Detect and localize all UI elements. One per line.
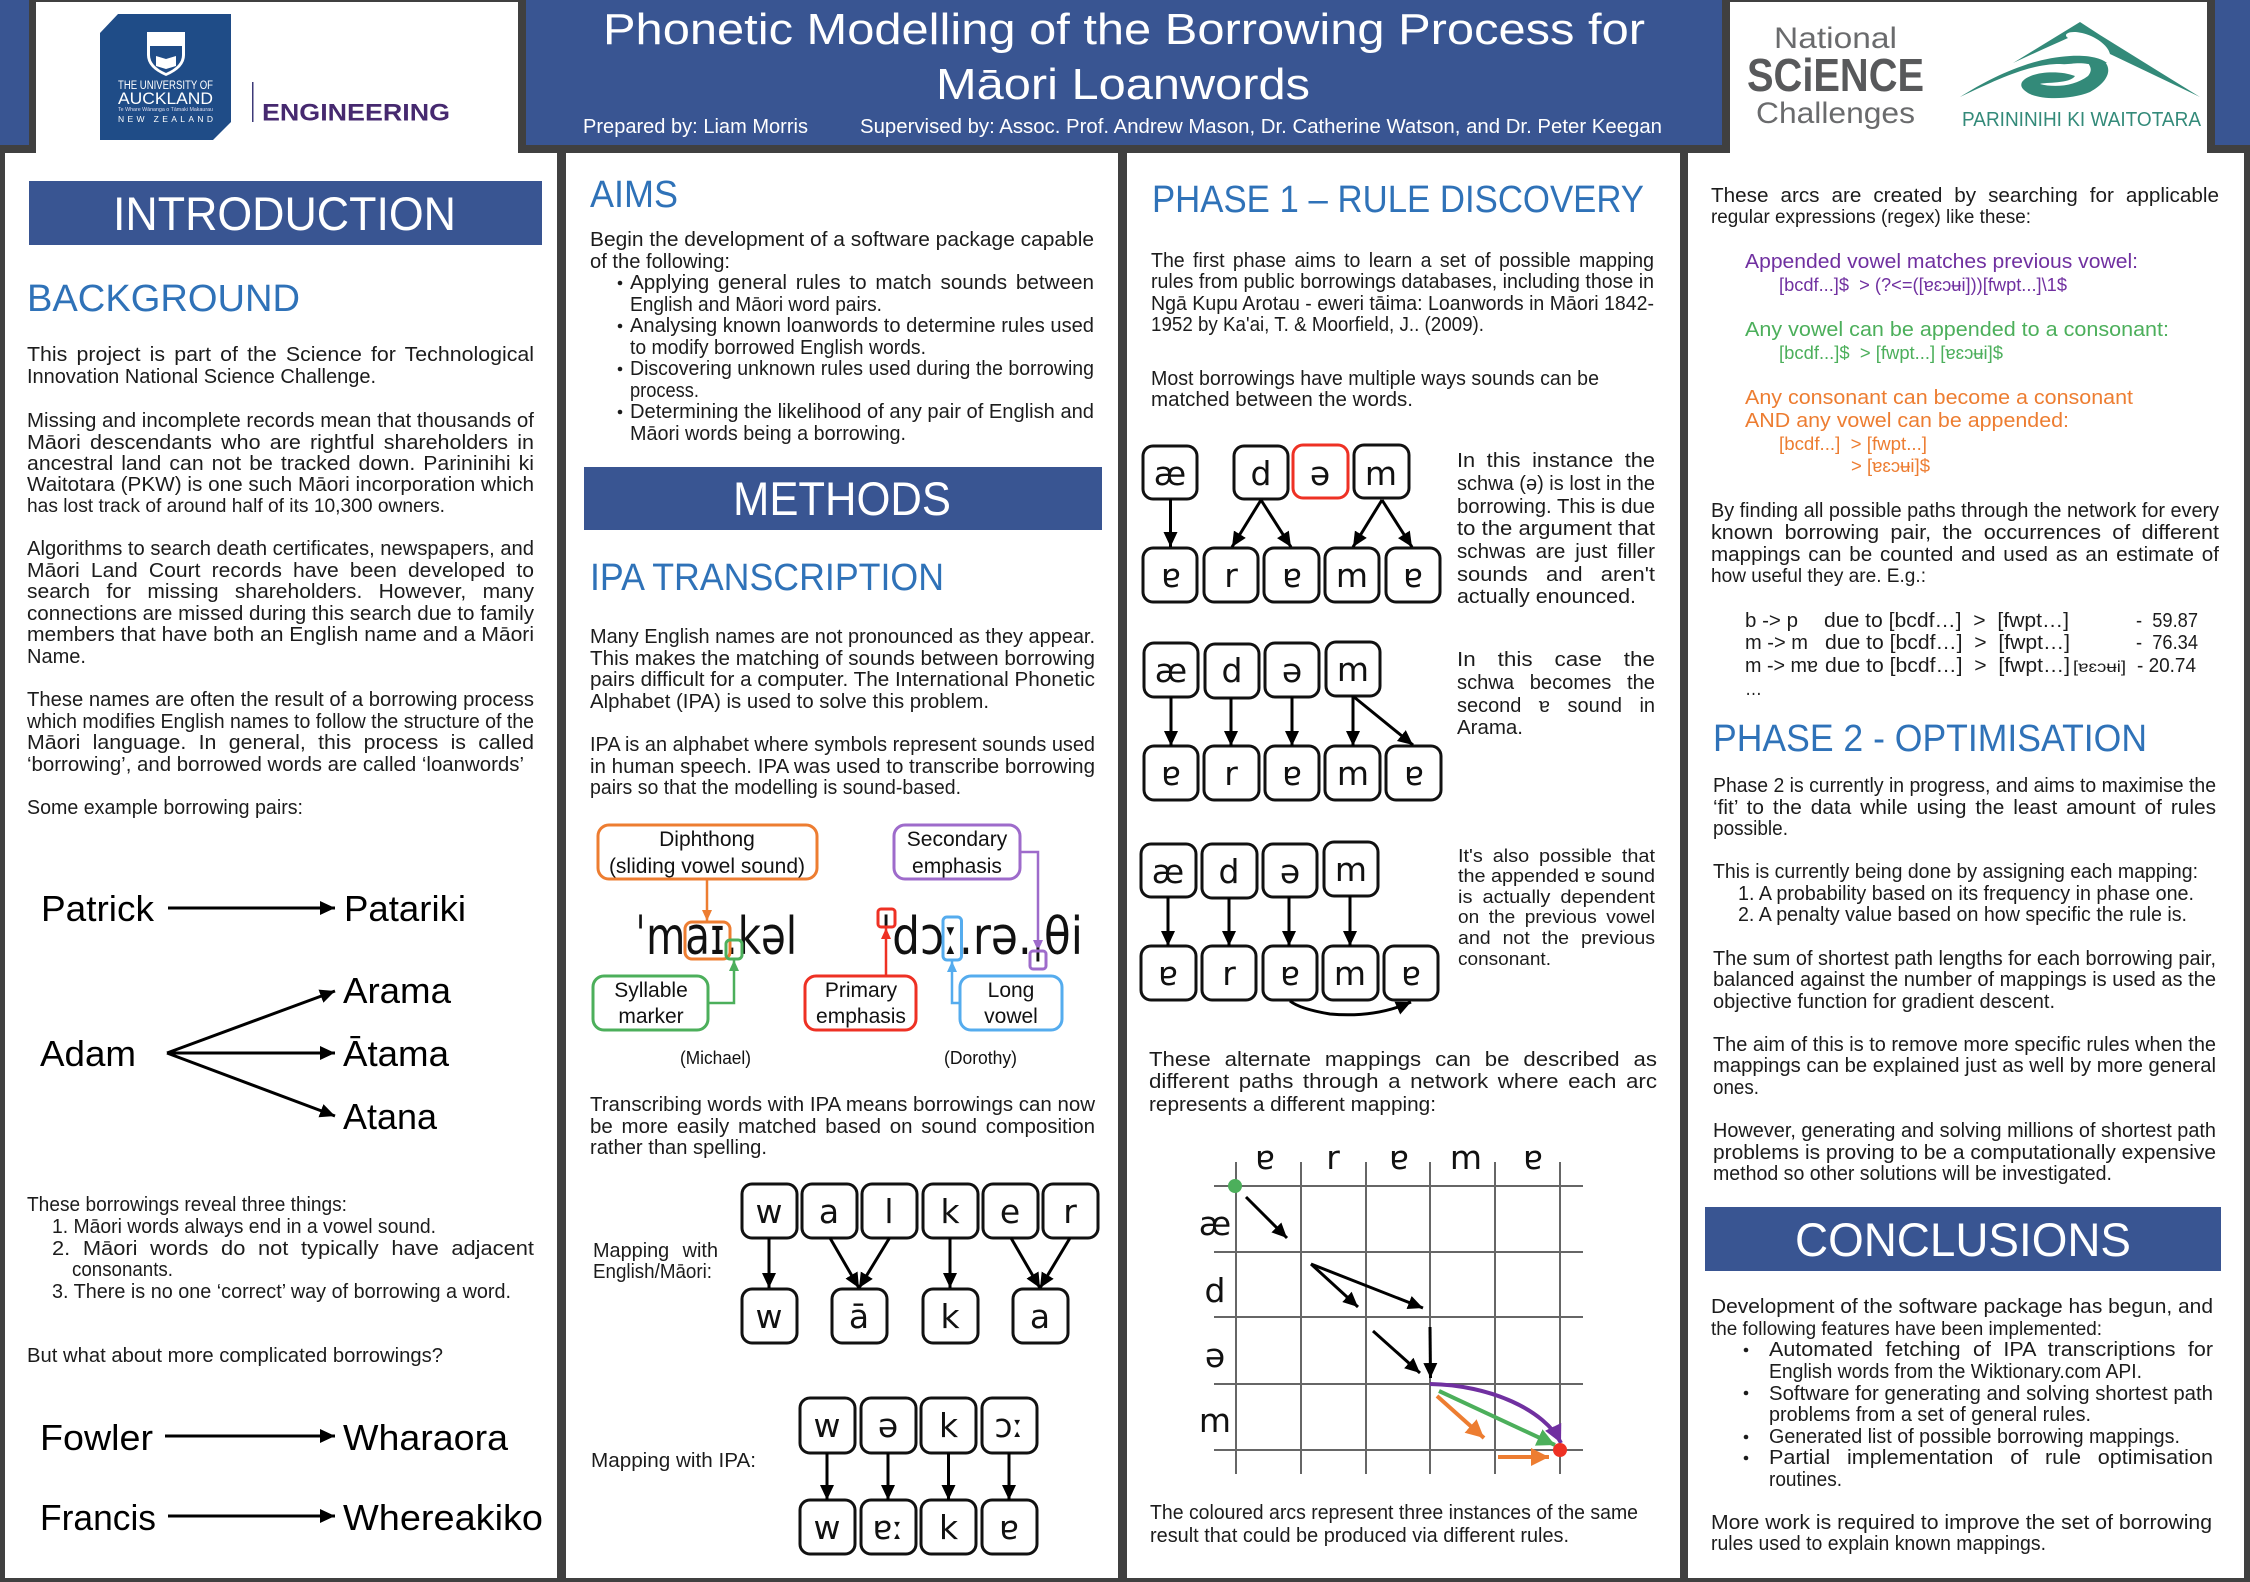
engineering wordmark: ENGINEERING — [262, 100, 450, 126]
text: alternate mappings: different paths through a network where each arc — [1149, 1071, 1657, 1093]
label: mapping with English/Māori — [593, 1240, 718, 1283]
diagram: mapping two, schwa becomes vowel: m — [1337, 650, 1369, 689]
heading: phase 2: PHASE 2 - OPTIMISATION — [1713, 718, 2147, 760]
diagram: IPA mapping: ə — [878, 1406, 898, 1445]
diagram: mapping three, appended vowel: m — [1334, 954, 1366, 993]
text: project context: Waitotara (PKW) is one such Māori incorporation which — [27, 474, 534, 496]
chart: mapping network grid: æ — [1199, 1204, 1231, 1243]
text: IPA benefit — [590, 1094, 1096, 1159]
text: conclusions: Automated fetching of IPA transcriptions for — [1769, 1339, 2213, 1361]
diagram: English to Māori mapping: k — [940, 1192, 960, 1231]
text: aims list: to modify borrowed English words. — [630, 337, 926, 359]
callout: secondary emphasis: emphasis — [912, 855, 1002, 878]
header: title banner — [526, 0, 1722, 145]
callout: secondary emphasis: Secondary — [907, 828, 1008, 851]
text: phase 2 description: balanced against the number of mappings is used as the — [1713, 969, 2216, 991]
text: schwa lost — [1457, 450, 1655, 608]
divider — [252, 82, 254, 122]
callout: diphthong: (sliding vowel sound) — [609, 855, 805, 878]
diagram: mapping one, schwa lost: r — [1224, 556, 1238, 595]
text: counting paths: known borrowing pair, the occurrences of different — [1711, 522, 2219, 544]
label: mapping with English/Māori: Mapping with — [593, 1240, 718, 1262]
text: alternate mappings: represents a different mapping: — [1149, 1094, 1436, 1116]
text: project context: Māori language. In general, this process is called — [27, 732, 534, 754]
table: mapping counts: m -> m — [1745, 632, 1808, 654]
text: project context: Algorithms to search death certificates, newspapers, and — [27, 538, 534, 560]
table: mapping counts: - 20.74 — [2137, 655, 2196, 677]
text: phase 1 introduction: rules from public borrowings databases, including those in — [1151, 271, 1654, 293]
diagram: mapping two, schwa becomes vowel: ɐ — [1282, 754, 1302, 793]
text: conclusions: Development of the software package has begun, and — [1711, 1296, 2213, 1318]
text: appended vowel: consonant. — [1458, 949, 1551, 969]
text: three findings: consonants. — [72, 1259, 173, 1281]
icon: University of Auckland crest — [100, 14, 231, 140]
diagram: Fowler and Francis borrowing arrows — [40, 1417, 543, 1538]
diagram: IPA mapping: k — [939, 1406, 959, 1445]
callout: primary emphasis — [805, 928, 916, 1030]
text: project context: These names are often the result of a borrowing process — [27, 689, 534, 711]
text: phase 2 description: mappings can be explained just as well by more general — [1713, 1055, 2216, 1077]
chart: mapping network grid: ɐ — [1523, 1138, 1543, 1177]
text: schwa lost: to the argument that — [1457, 518, 1655, 540]
panel: introduction — [5, 2, 557, 1578]
text: project context — [26, 344, 534, 819]
diagram: Patrick and Adam borrowing arrows: Adam — [40, 1033, 136, 1074]
text: schwa becomes vowel: Arama. — [1457, 717, 1523, 739]
text: IPA explanation: IPA is an alphabet where symbols represent sounds used — [590, 734, 1095, 756]
table: mapping counts: m -> mɐ — [1745, 655, 1818, 677]
text: phase 2 description: objective function for gradient descent. — [1713, 991, 2055, 1013]
text: three findings: But what about more complicated borrowings? — [27, 1345, 443, 1367]
diagram: English to Māori mapping: l — [884, 1192, 894, 1231]
diagram: mapping three, appended vowel: m — [1335, 850, 1367, 889]
text: schwa lost: sounds and aren't — [1457, 564, 1655, 586]
text: phase 2 description: 2. A penalty value based on how specific the rule is. — [1738, 904, 2187, 926]
text: project context: has lost track of around half of its 10,300 owners. — [27, 496, 445, 517]
text: schwa lost: schwa (ə) is lost in the — [1457, 473, 1655, 495]
text: project context: Innovation National Science Challenge. — [27, 366, 376, 388]
text: phase 1 introduction: matched between the words. — [1151, 389, 1413, 411]
diagram: IPA mapping: ɐː — [873, 1508, 903, 1547]
diagram: mapping three, appended vowel: ɐ — [1158, 954, 1178, 993]
text: schwa becomes vowel: In this case the — [1457, 649, 1655, 671]
text: three findings: These borrowings reveal three things: — [27, 1194, 347, 1216]
diagram: mapping two, schwa becomes vowel: r — [1224, 754, 1238, 793]
text: phase 2 description: method so other solutions will be investigated. — [1713, 1163, 2112, 1185]
authors: Prepared by: Liam Morris — [583, 116, 808, 138]
text: IPA explanation: Many English names are not pronounced as they appear. — [590, 626, 1095, 648]
chart: mapping network grid: r — [1326, 1138, 1340, 1177]
regex: purple rule — [1745, 251, 2138, 295]
table: mapping counts — [1745, 610, 2198, 700]
diagram: English to Māori mapping: a — [1030, 1297, 1050, 1336]
diagram: English to Māori mapping: w — [756, 1192, 782, 1231]
diagram: mapping two, schwa becomes vowel: d — [1222, 651, 1242, 690]
callout: syllable marker: Syllable — [614, 979, 688, 1002]
diagram: Fowler and Francis borrowing arrows: Whereakiko — [343, 1497, 543, 1538]
diagram: IPA mapping: w — [814, 1406, 840, 1445]
diagram: mapping one, schwa lost: m — [1336, 556, 1368, 595]
text: counting paths: mappings can be counted and used as an estimate of — [1711, 544, 2219, 566]
diagram: mapping three, appended vowel: r — [1222, 954, 1236, 993]
text: alternate mappings — [1149, 1049, 1657, 1116]
text: phase 2 description: This is currently being done by assigning each mapping: — [1713, 861, 2198, 883]
chart: mapping network grid: d — [1205, 1271, 1225, 1310]
logo box: University of Auckland Engineering — [36, 2, 518, 154]
diagram: mapping two, schwa becomes vowel: ɐ — [1404, 754, 1424, 793]
text: IPA explanation — [590, 626, 1095, 799]
callout: diphthong — [598, 825, 817, 921]
text: conclusions: Generated list of possible borrowing mappings. — [1769, 1426, 2180, 1448]
diagram: mapping two, schwa becomes vowel: m — [1337, 754, 1369, 793]
table: mapping counts: due to [bcdf…] > [fwpt…] — [1825, 655, 2070, 677]
table: mapping counts: … — [1745, 678, 1762, 700]
diagram: mapping one, schwa lost: d — [1251, 454, 1271, 493]
authors: Supervised by: Assoc. Prof. Andrew Mason, Dr. Catherine Watson, and Dr. Peter Keegan — [860, 116, 1662, 138]
callout: long vowel: vowel — [984, 1005, 1038, 1028]
diagram: Patrick and Adam borrowing arrows: Ātama — [343, 1033, 450, 1074]
panel: regex, phase 2 and conclusions — [1688, 2, 2244, 1578]
title: Māori Loanwords — [936, 60, 1310, 109]
text: project context: search for missing shareholders. However, many — [27, 581, 534, 603]
icon: University of Auckland crest: THE UNIVERSITY OF — [118, 80, 213, 92]
text: three findings: 3. There is no one ‘correct’ way of borrowing a word. — [52, 1281, 511, 1303]
text: conclusions: problems from a set of general rules. — [1769, 1404, 2091, 1426]
regex: purple rule: [bcdf...]$ > (?<=([ɐɛɔʉi]))[fwpt...]\1$ — [1779, 275, 2067, 295]
text: phase 2 description: 1. A probability based on its frequency in phase one. — [1738, 883, 2194, 905]
text: regular expressions intro — [1711, 185, 2219, 228]
text: three findings: 1. Māori words always end in a vowel sound. — [52, 1216, 436, 1238]
text: phase 1 introduction: Most borrowings have multiple ways sounds can be — [1151, 368, 1599, 390]
conclusions bar: CONCLUSIONS — [1795, 1213, 2131, 1266]
introduction bar — [29, 181, 542, 245]
label: Dorothy: (Dorothy) — [944, 1048, 1017, 1068]
text: project context: Some example borrowing pairs: — [27, 797, 303, 819]
text: counting paths: By finding all possible paths through the network for every — [1711, 500, 2219, 522]
text: coloured arcs caption: result that could be produced via different rules. — [1150, 1525, 1569, 1547]
text: aims list: English and Māori word pairs. — [630, 294, 882, 316]
chart: mapping network grid: ə — [1205, 1336, 1225, 1375]
text: schwa lost: schwas are just filler — [1457, 541, 1655, 563]
callout: long vowel — [952, 961, 1062, 1030]
heading: background: BACKGROUND — [27, 278, 300, 320]
diagram: mapping three, appended vowel: ə — [1280, 852, 1300, 891]
icon: University of Auckland crest: Te Whare Wānanga o Tāmaki Makaurau — [118, 107, 213, 113]
diagram: English to Māori mapping: e — [1000, 1192, 1020, 1231]
text: phase 2 description — [1713, 775, 2216, 1185]
text: project context: ‘borrowing’, and borrowed words are called ‘loanwords’ — [27, 754, 524, 776]
text: phase 1 introduction: The first phase aims to learn a set of possible mapping — [1151, 250, 1654, 272]
text: project context: ancestral land can not be tracked down. Parininihi ki — [27, 453, 534, 475]
heading: phase 1: PHASE 1 – RULE DISCOVERY — [1152, 179, 1644, 221]
diagram: Patrick and Adam borrowing arrows — [40, 888, 466, 1137]
text: three findings: 2. Māori words do not typically have adjacent — [52, 1238, 534, 1260]
conclusions bar — [1705, 1207, 2221, 1271]
chart: mapping network grid: m — [1450, 1138, 1482, 1177]
diagram: mapping one, schwa lost: m — [1365, 454, 1397, 493]
title: Phonetic Modelling of the Borrowing Process for — [603, 5, 1645, 54]
text: coloured arcs caption: The coloured arcs represent three instances of the same — [1150, 1502, 1638, 1524]
diagram: mapping one, schwa lost — [1143, 445, 1440, 602]
diagram: mapping three, appended vowel: ɐ — [1401, 954, 1421, 993]
text: phase 2 description: ‘fit’ to the data while using the least amount of rules — [1713, 797, 2216, 819]
header band right — [2215, 0, 2250, 145]
text: schwa becomes vowel — [1457, 649, 1655, 739]
text: conclusions: rules used to explain known mappings. — [1711, 1533, 2046, 1555]
text: aims list: Determining the likelihood of any pair of English and — [630, 401, 1094, 423]
text: appended vowel: It's also possible that — [1458, 846, 1655, 866]
text: IPA benefit: be more easily matched based on sound composition — [590, 1116, 1095, 1138]
text: IPA explanation: This makes the matching of sounds between borrowing — [590, 648, 1095, 670]
regex: green rule: [bcdf...]$ > [fwpt...] [ɐɛɔʉi]$ — [1779, 343, 2003, 363]
table: mapping counts: [ɐɛɔʉi] — [2073, 659, 2126, 676]
regex: orange rule — [1745, 387, 2133, 476]
diagram: mapping one, schwa lost: ɐ — [1403, 556, 1423, 595]
regex: orange rule: [bcdf...] > [fwpt...] — [1779, 434, 1927, 454]
logo: National Science Challenges: Challenges — [1756, 97, 1915, 130]
text: IPA explanation: Alphabet (IPA) is used to solve this problem. — [590, 691, 989, 713]
text: conclusions: More work is required to improve the set of borrowing — [1711, 1512, 2212, 1534]
text: IPA explanation: pairs difficult for a computer. The International Phonetic — [590, 669, 1095, 691]
chart: mapping network grid: ɐ — [1389, 1138, 1409, 1177]
text: project context: members that have both an English name and a Māori — [27, 624, 534, 646]
logo: Parininihi ki Waitotara: PARININIHI KI WAITOTARA — [1962, 109, 2202, 131]
regex: orange rule: > [ɐɛɔʉi]$ — [1851, 456, 1930, 476]
text: coloured arcs caption — [1150, 1502, 1638, 1547]
diagram: mapping two, schwa becomes vowel: ɐ — [1161, 754, 1181, 793]
text: phase 2 description: possible. — [1713, 818, 1788, 840]
diagram: mapping one, schwa lost: ɐ — [1161, 556, 1181, 595]
label: mapping with IPA: Mapping with IPA: — [591, 1450, 756, 1472]
methods bar — [584, 467, 1102, 530]
diagram: Patrick and Adam borrowing arrows: Patariki — [344, 888, 466, 929]
panel: aims and methods — [566, 153, 1118, 1578]
text: project context: Māori Land Court records have been developed to — [27, 560, 534, 582]
text: conclusions: Partial implementation of rule optimisation — [1769, 1447, 2213, 1469]
text: phase 1 introduction: Ngā Kupu Arotau - eweri tāima: Loanwords in Māori 1842- — [1151, 293, 1654, 315]
text: aims list: Māori words being a borrowing. — [630, 423, 906, 445]
title — [603, 5, 1645, 109]
diagram: mapping one, schwa lost: ɐ — [1282, 556, 1302, 595]
text: project context: connections are missed during this search due to family — [27, 603, 534, 625]
diagram: English to Māori mapping — [593, 1184, 1098, 1343]
diagram: mapping two, schwa becomes vowel: æ — [1155, 651, 1187, 690]
callout: syllable marker — [593, 960, 734, 1030]
text: appended vowel: and not the previous — [1458, 928, 1655, 948]
regex: green rule — [1745, 319, 2169, 363]
text: schwa lost: borrowing. This is due — [1457, 496, 1655, 518]
chart: mapping network grid: m — [1199, 1401, 1231, 1440]
text: IPA benefit: rather than spelling. — [590, 1137, 767, 1159]
text: project context: Missing and incomplete records mean that thousands of — [27, 410, 534, 432]
diagram: Fowler and Francis borrowing arrows: Francis — [40, 1497, 156, 1538]
label: Michael: (Michael) — [680, 1048, 751, 1068]
diagram: Fowler and Francis borrowing arrows: Wharaora — [343, 1417, 509, 1458]
diagram: English to Māori mapping: k — [940, 1297, 960, 1336]
text: aims list: process. — [630, 380, 699, 402]
text: IPA explanation: pairs so that the modelling is sound-based. — [590, 777, 961, 799]
diagram: mapping two, schwa becomes vowel — [1144, 642, 1441, 800]
text: phase 2 description: problems is proving to be a computationally expensive — [1713, 1142, 2216, 1164]
diagram: IPA mapping: k — [939, 1508, 959, 1547]
heading: IPA transcription: IPA TRANSCRIPTION — [590, 557, 944, 599]
text: phase 2 description: Phase 2 is currently in progress, and aims to maximise the — [1713, 775, 2216, 797]
table: mapping counts: - 59.87 — [2136, 610, 2198, 632]
diagram: mapping three, appended vowel: ɐ — [1280, 954, 1300, 993]
IPA word: Michael: ˈmaɪ.kəl — [635, 907, 797, 967]
callout: long vowel: Long — [988, 979, 1034, 1002]
diagram: mapping three, appended vowel: d — [1219, 852, 1239, 891]
text: aims list: Discovering unknown rules used during the borrowing — [630, 358, 1094, 380]
text: aims list: Analysing known loanwords to determine rules used — [630, 315, 1094, 337]
label: mapping with English/Māori: English/Māori: — [593, 1261, 712, 1283]
logo box: National Science Challenges and Parininihi ki Waitotara — [1730, 2, 2207, 154]
text: schwa lost: In this instance the — [1457, 450, 1655, 472]
diagram: IPA mapping: w — [814, 1508, 840, 1547]
text: aims list: of the following: — [590, 251, 730, 273]
text: phase 1 introduction: 1952 by Ka'ai, T. & Moorfield, J.. (2009). — [1151, 314, 1484, 336]
text: schwa becomes vowel: second ɐ sound in — [1457, 695, 1655, 717]
table: mapping counts: - 76.34 — [2136, 632, 2198, 654]
panel: phase 1 rule discovery — [1127, 153, 1680, 1578]
diagram: mapping one, schwa lost: æ — [1154, 454, 1186, 493]
text: alternate mappings: These alternate mappings can be described as — [1149, 1049, 1657, 1071]
heading: aims: AIMS — [590, 174, 678, 216]
text: appended vowel: is actually dependent — [1458, 887, 1655, 907]
callout: secondary emphasis — [894, 825, 1038, 951]
text: appended vowel — [1458, 846, 1655, 969]
diagram: Patrick and Adam borrowing arrows: Patrick — [41, 888, 155, 929]
text: aims list — [590, 229, 1094, 445]
diagram: Patrick and Adam borrowing arrows: Atana — [343, 1096, 438, 1137]
text: phase 2 description: ones. — [1713, 1077, 1759, 1099]
text: project context: This project is part of the Science for Technological — [27, 344, 534, 366]
logo: National Science Challenges: National — [1774, 22, 1897, 55]
text: regular expressions intro: regular expressions (regex) like these: — [1711, 207, 2031, 228]
logo: National Science Challenges: SCiENCE — [1747, 49, 1924, 101]
introduction bar: INTRODUCTION — [113, 187, 456, 240]
diagram: IPA mapping: ɐ — [999, 1508, 1019, 1547]
diagram: mapping three, appended vowel — [1141, 842, 1438, 1015]
logo: National Science Challenges — [1747, 22, 1924, 130]
text: project context: Name. — [27, 646, 86, 668]
text: conclusions: English words from the Wiktionary.com API. — [1769, 1361, 2142, 1383]
regex: purple rule: Appended vowel matches previous vowel: — [1745, 251, 2138, 273]
chart: mapping network grid — [1199, 1138, 1583, 1474]
diagram: English to Māori mapping: ā — [849, 1297, 869, 1336]
text: conclusions — [1711, 1296, 2213, 1555]
diagram: mapping three, appended vowel: æ — [1152, 852, 1184, 891]
text: phase 2 description: The aim of this is to remove more specific rules when the — [1713, 1034, 2216, 1056]
callout: primary emphasis: Primary — [825, 979, 898, 1002]
icon: University of Auckland crest: AUCKLAND — [118, 89, 213, 108]
text: conclusions: the following features have been implemented: — [1711, 1319, 2102, 1340]
diagram: Fowler and Francis borrowing arrows: Fowler — [40, 1417, 153, 1458]
text: appended vowel: on the previous vowel — [1458, 907, 1655, 927]
diagram: English to Māori mapping: w — [756, 1297, 782, 1336]
text: schwa lost: actually enounced. — [1457, 586, 1636, 608]
icon: University of Auckland crest: NEW ZEALAND — [118, 114, 213, 124]
diagram: English to Māori mapping: r — [1063, 1192, 1077, 1231]
callout: diphthong: Diphthong — [659, 828, 755, 851]
diagram: IPA mapping — [591, 1398, 1037, 1554]
text: aims list: Begin the development of a software package capable — [590, 229, 1094, 251]
table: mapping counts: due to [bcdf…] > [fwpt…] — [1824, 610, 2069, 632]
text: aims list: Applying general rules to match sounds between — [630, 272, 1094, 294]
text: counting paths: how useful they are. E.g.: — [1711, 566, 1926, 587]
diagram: English to Māori mapping: a — [819, 1192, 839, 1231]
regex: green rule: Any vowel can be appended to a consonant: — [1745, 319, 2169, 341]
IPA word: Dorothy: ˈdɔː.rə.ˌθi — [880, 907, 1083, 967]
diagram: IPA annotations — [593, 825, 1083, 1068]
text: IPA explanation: in human speech. IPA was used to transcribe borrowing — [590, 756, 1095, 778]
text: schwa becomes vowel: schwa becomes the — [1457, 672, 1655, 694]
diagram: IPA mapping: ɔː — [994, 1406, 1024, 1445]
text: three findings — [27, 1194, 534, 1367]
text: project context: Māori descendants who are rightful shareholders in — [27, 432, 534, 454]
text: phase 2 description: However, generating and solving millions of shortest path — [1713, 1120, 2216, 1142]
methods bar: METHODS — [733, 472, 951, 525]
regex: orange rule: AND any vowel can be appended: — [1745, 410, 2069, 432]
text: conclusions: routines. — [1769, 1469, 1842, 1491]
text: regular expressions intro: These arcs are created by searching for applicable — [1711, 185, 2219, 207]
logo: Parininihi ki Waitotara — [1960, 22, 2202, 131]
table: mapping counts: b -> p — [1745, 610, 1798, 632]
text: counting paths — [1711, 500, 2219, 587]
table: mapping counts: due to [bcdf…] > [fwpt…] — [1825, 632, 2070, 654]
regex: orange rule: Any consonant can become a consonant — [1745, 387, 2133, 409]
text: appended vowel: the appended ɐ sound — [1458, 866, 1655, 886]
text: IPA benefit: Transcribing words with IPA means borrowings can now — [590, 1094, 1096, 1116]
text: project context: which modifies English names to follow the structure of the — [26, 711, 534, 733]
chart: mapping network grid: ɐ — [1255, 1138, 1275, 1177]
text: phase 2 description: The sum of shortest path lengths for each borrowing pair, — [1713, 948, 2216, 970]
header band left — [0, 0, 29, 145]
text: conclusions: Software for generating and solving shortest path — [1769, 1383, 2213, 1405]
diagram: mapping one, schwa lost: ə — [1310, 454, 1330, 493]
diagram: mapping two, schwa becomes vowel: ə — [1282, 651, 1302, 690]
diagram: Patrick and Adam borrowing arrows: Arama — [343, 970, 452, 1011]
callout: primary emphasis: emphasis — [816, 1005, 906, 1028]
text: phase 1 introduction — [1151, 250, 1654, 411]
callout: syllable marker: marker — [618, 1005, 684, 1028]
